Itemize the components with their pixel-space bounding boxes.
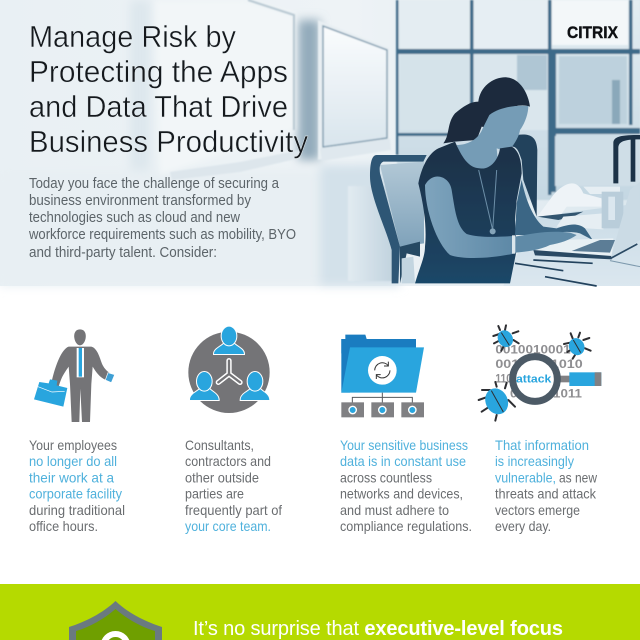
column 2 text: contractors and	[185, 454, 271, 469]
column 2 text	[185, 438, 282, 534]
face and neck	[457, 106, 528, 180]
column 4 text: vulnerable,	[495, 470, 556, 486]
title: and Data That Drive	[29, 90, 288, 124]
intro paragraph	[28, 176, 296, 261]
column 1 text: Your employees	[29, 438, 117, 453]
dress	[415, 142, 522, 283]
binary digits: 110	[495, 373, 512, 386]
briefcase	[34, 379, 67, 407]
intro paragraph: workforce requirements such as mobility, BYO	[28, 227, 296, 243]
column 4 text: That information	[495, 438, 589, 453]
column 3 text: Your sensitive business	[340, 438, 468, 453]
Citrix logo: CITRIX	[567, 23, 619, 42]
binary digits: 01 111 1011	[510, 387, 583, 400]
column 4 text: every day.	[495, 519, 551, 534]
near chair frame	[370, 155, 427, 283]
chair behind woman	[512, 134, 537, 217]
column 1 text	[29, 438, 125, 534]
bugs	[479, 325, 591, 421]
bracelet	[512, 235, 515, 254]
column 3 text: across countless	[340, 470, 432, 486]
banner text: It’s no surprise that executive-level focus	[193, 618, 563, 640]
column 1 text: office hours.	[29, 519, 98, 534]
icon: data folder with sub-folders	[341, 335, 424, 417]
title: Business Productivity	[29, 125, 309, 159]
right whiteboard	[318, 20, 391, 161]
binary digits: 001 101 1010	[495, 358, 583, 371]
laptop screen	[611, 182, 640, 258]
column 4 text: vectors emerge	[495, 503, 580, 518]
intro paragraph: technologies such as cloud and new	[29, 210, 240, 226]
column 4 text	[495, 438, 597, 534]
near arm	[425, 176, 515, 258]
hero photo: woman working on a laptop in an office	[0, 0, 640, 286]
column 4 text: is increasingly	[495, 454, 574, 469]
intro paragraph: and third-party talent. Consider:	[29, 245, 217, 261]
desk	[503, 203, 640, 286]
column 3 text	[340, 438, 472, 534]
papers	[537, 183, 602, 218]
column 2 text: parties are	[185, 486, 244, 502]
binary digits: 0010010001	[495, 343, 571, 356]
icon: team network circle	[188, 327, 270, 413]
pencils	[515, 260, 597, 286]
icon: magnifier finding attack in binary with bugs	[479, 325, 601, 421]
title	[29, 20, 309, 159]
network connector	[218, 361, 240, 382]
column 3 text: and must adhere to	[340, 503, 449, 518]
magnifier	[558, 376, 570, 382]
column 1 text: corporate facility	[29, 486, 122, 502]
person left	[190, 372, 219, 400]
icon: security shield	[69, 601, 162, 640]
necklace	[479, 170, 497, 230]
column 2 text: your core team.	[185, 519, 271, 534]
hair	[443, 77, 530, 143]
window panes and frame	[396, 0, 640, 200]
icon: businessman with briefcase and phone	[34, 329, 115, 422]
intro paragraph: business environment transformed by	[29, 193, 252, 209]
column 4 text: as new	[559, 470, 597, 486]
phone	[105, 373, 115, 383]
person right	[241, 372, 269, 400]
title: Protecting the Apps	[29, 55, 288, 89]
water glass	[602, 192, 623, 228]
column 3 text: data is in constant use	[340, 454, 466, 469]
near hand	[515, 232, 577, 253]
column 4 text: threats and attack	[495, 486, 596, 502]
office scene traced at 3x	[370, 77, 640, 286]
column 2 text: frequently part of	[185, 503, 282, 518]
person top	[214, 327, 244, 354]
laptop base	[533, 238, 613, 258]
column 1 text: during traditional	[29, 503, 125, 518]
column 1 text: no longer do all	[29, 454, 117, 469]
column 2 text: other outside	[185, 470, 259, 486]
far arm	[515, 180, 593, 240]
column 1 text: their work at a	[29, 470, 114, 486]
column 3 text: compliance regulations.	[340, 519, 472, 534]
right-hand chair	[613, 135, 640, 183]
chair seat	[400, 242, 420, 283]
column 2 text: Consultants,	[185, 438, 254, 453]
near chair mesh	[380, 162, 424, 247]
intro paragraph: Today you face the challenge of securing a	[29, 176, 280, 192]
column 3 text: networks and devices,	[340, 486, 463, 502]
low cabinet	[348, 186, 398, 281]
icon: magnifier finding attack in binary with bugs: attack	[516, 374, 551, 386]
green banner	[0, 584, 640, 640]
binary digits	[495, 343, 583, 400]
left whiteboard	[155, 0, 300, 180]
title: Manage Risk by	[29, 20, 237, 54]
